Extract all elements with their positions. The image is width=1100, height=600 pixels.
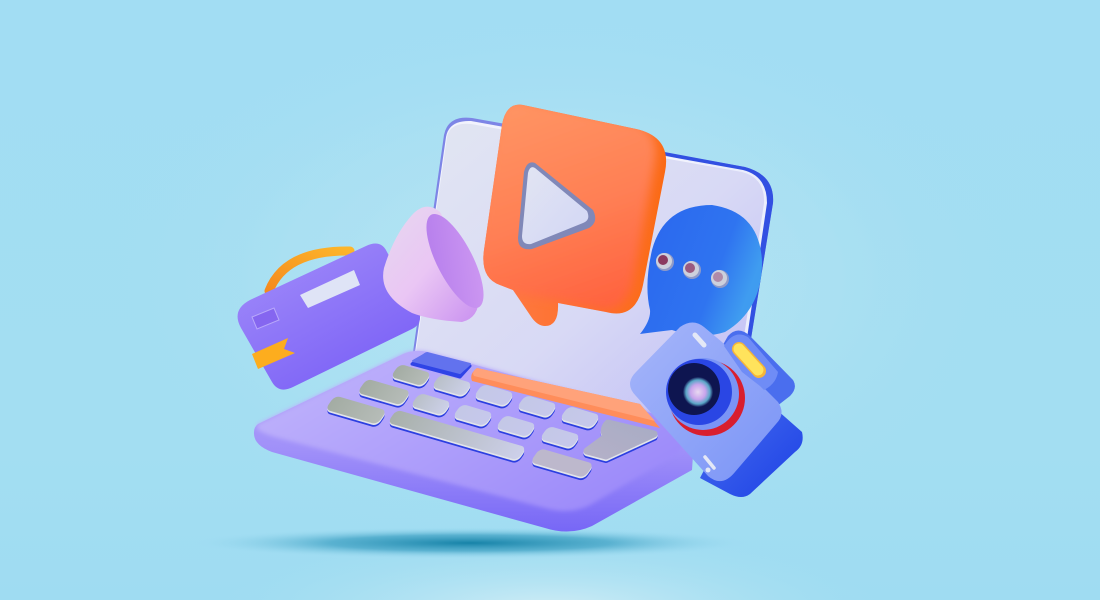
- camera flash housing back: [720, 330, 795, 410]
- flash lamp highlight: [739, 349, 758, 370]
- camera label plate: [300, 270, 360, 308]
- camera body: [238, 244, 420, 390]
- camera ribbon: [252, 338, 295, 369]
- camera flash face: [724, 334, 778, 390]
- keyboard keys: [325, 364, 654, 481]
- orange play bubble: [477, 100, 666, 326]
- blue chat bubble: [640, 205, 762, 336]
- icon: camera handle: [269, 251, 350, 291]
- keyboard base: [254, 351, 695, 532]
- floor shadow: [190, 527, 750, 559]
- cone opening: [415, 206, 495, 316]
- orange key bar: [471, 368, 660, 428]
- icon: play triangle: [518, 162, 595, 249]
- enter key: [587, 423, 654, 460]
- camera shutter marks: [695, 335, 704, 345]
- blue function key: [412, 353, 470, 377]
- camera small window: [252, 308, 279, 329]
- camera cone: [383, 207, 479, 322]
- chat dots: [656, 253, 729, 288]
- illustration: floating laptop with media icons: [238, 100, 864, 600]
- laptop screen: [413, 118, 773, 430]
- camera front face: [630, 322, 782, 481]
- camera lens: [666, 358, 745, 436]
- video camera: [238, 206, 495, 390]
- camera back body: [700, 395, 803, 497]
- photo camera: [630, 322, 803, 497]
- flash lamp: [739, 349, 759, 371]
